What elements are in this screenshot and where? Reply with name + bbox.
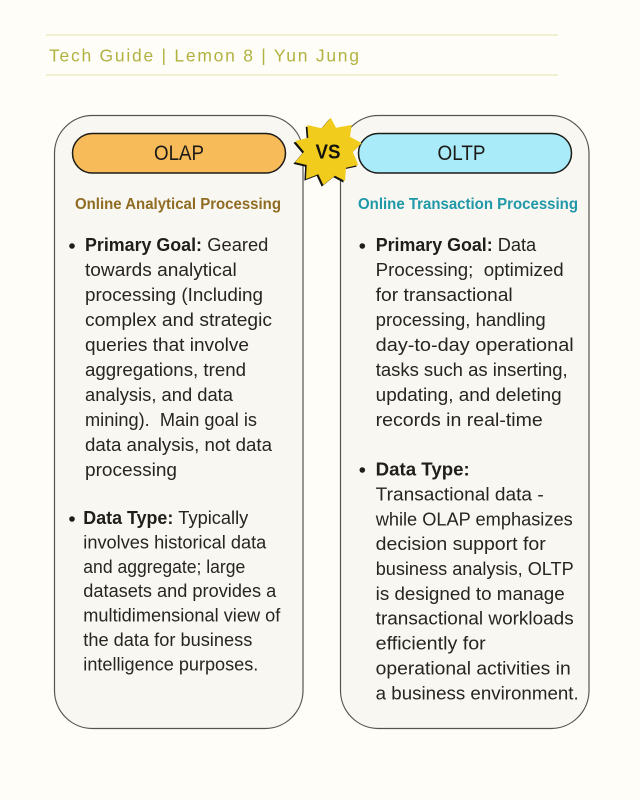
OLAP data type: datasets and provides a (83, 581, 277, 601)
OLTP data type: is designed to manage (376, 583, 565, 604)
OLAP data type: intelligence purposes. (83, 654, 258, 674)
OLAP primary goal: queries that involve (85, 334, 249, 355)
panel background (54, 116, 303, 728)
OLTP primary goal (360, 234, 574, 430)
OLTP primary goal: tasks such as inserting, (376, 359, 568, 380)
OLTP data type (360, 458, 579, 703)
VS starburst badge: VS (316, 142, 340, 164)
OLTP primary goal: processing, handling (376, 309, 546, 330)
OLAP data type: the data for business (83, 630, 252, 650)
panel: OLTP (340, 116, 589, 728)
OLAP primary goal: Geared (207, 234, 268, 255)
OLAP heading pill: OLAP (154, 142, 204, 165)
OLTP primary goal: day-to-day operational (376, 334, 574, 355)
OLTP subtitle: Online Transaction Processing (358, 196, 578, 213)
OLTP primary goal: Data (498, 234, 537, 255)
OLAP primary goal: processing (Including (85, 284, 263, 305)
OLTP primary goal: records in real-time (376, 409, 543, 430)
OLAP primary goal: towards analytical (85, 259, 237, 280)
OLTP data type: while OLAP emphasizes (375, 508, 573, 529)
OLAP heading pill (72, 134, 286, 173)
OLTP heading pill: OLTP (438, 142, 486, 165)
OLTP primary goal: Processing; optimized (376, 259, 564, 280)
OLAP data type: and aggregate; large (83, 557, 245, 577)
OLAP data type: Typically (178, 508, 248, 528)
OLAP primary goal (69, 234, 273, 480)
OLAP data type: involves historical data (83, 532, 267, 552)
OLTP data type: business analysis, OLTP (376, 558, 574, 579)
OLTP data type: Data Type: (376, 458, 470, 480)
panel background (340, 116, 589, 728)
OLTP data type: operational activities in (376, 657, 571, 678)
OLTP heading pill (358, 134, 572, 173)
OLAP data type (69, 508, 281, 674)
OLAP subtitle: Online Analytical Processing (75, 196, 281, 213)
OLAP primary goal: aggregations, trend (85, 359, 246, 380)
OLTP primary goal: for transactional (376, 284, 513, 305)
OLAP primary goal: mining). Main goal is (85, 409, 257, 430)
OLTP data type: a business environment. (376, 682, 579, 703)
OLAP primary goal: complex and strategic (85, 309, 272, 330)
OLTP data type: efficiently for (376, 633, 486, 654)
OLTP data type: Transactional data - (376, 484, 544, 504)
OLAP primary goal: Primary Goal: (85, 234, 202, 255)
OLTP data type: transactional workloads (376, 608, 574, 629)
OLTP data type: decision support for (376, 533, 546, 554)
OLTP primary goal: Primary Goal: (376, 234, 493, 255)
OLAP data type: multidimensional view of (83, 606, 281, 626)
OLAP data type: Data Type: (83, 508, 173, 528)
OLAP primary goal: data analysis, not data (85, 434, 273, 455)
OLTP primary goal: updating, and deleting (376, 384, 562, 405)
VS starburst badge (293, 118, 362, 187)
OLAP primary goal: processing (85, 459, 177, 480)
title: Tech Guide | Lemon 8 | Yun Jung (49, 46, 359, 66)
OLAP primary goal: analysis, and data (85, 384, 234, 405)
panel: OLAP (54, 116, 303, 728)
